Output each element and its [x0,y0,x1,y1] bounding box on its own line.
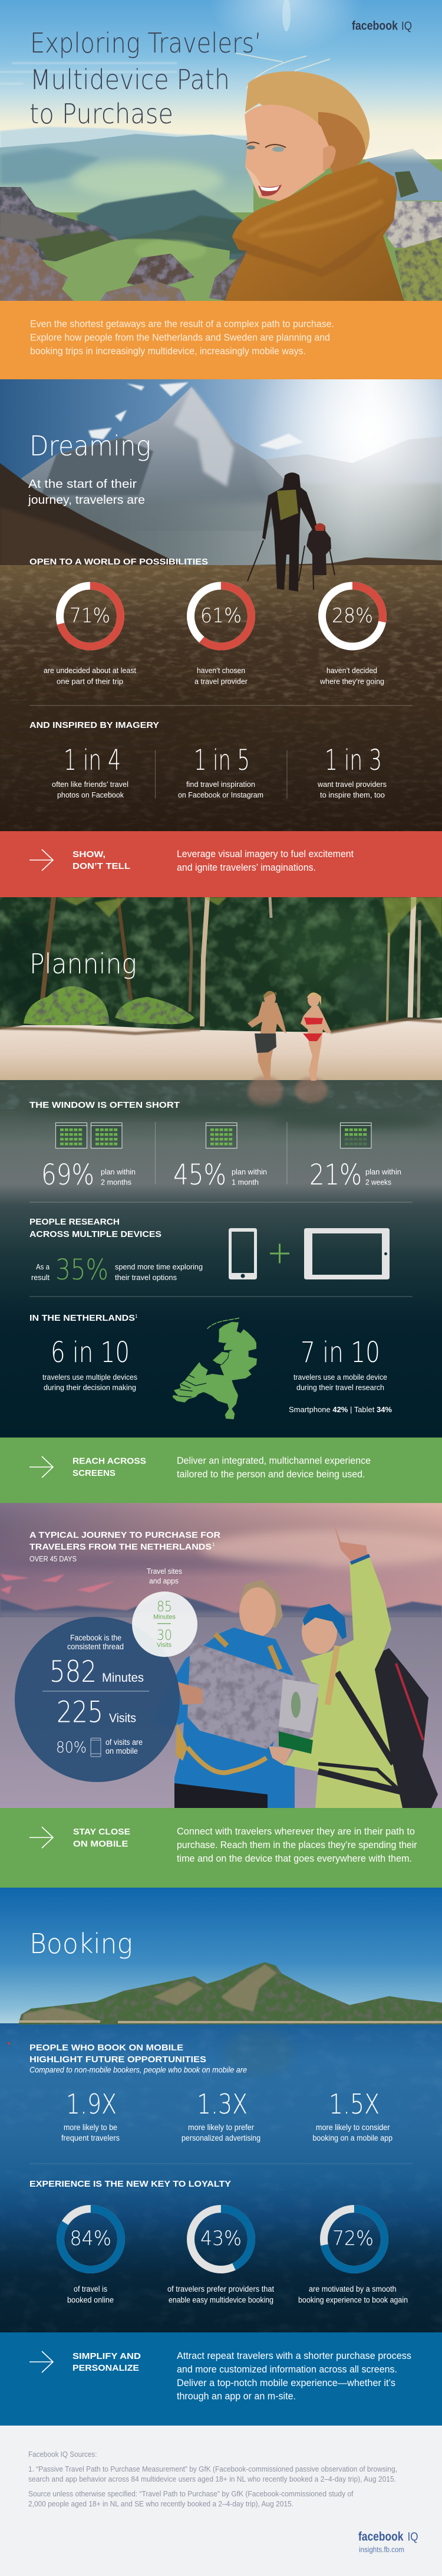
heading: typical journey: TRAVELERS FROM THE NETHERLANDS [29,1542,212,1552]
stat: 6 in 10: 6 in 10 [51,1336,130,1369]
stat: 45%: 1 month [232,1177,259,1187]
arrow [29,1827,53,1848]
stat: 1 in 5 [178,744,263,799]
stat: 1 in 4 [52,744,128,799]
heading: people research across multiple devices: PEOPLE RESEARCH [29,1218,120,1227]
stat: 1 in 3 [317,744,387,799]
callout text: Attract repeat travelers with a shorter purchase process [177,2351,411,2361]
panel: footer [28,2450,418,2554]
text block: sources: 2,000 people aged 18+ in NL and SE who recently booked a 2–4-day trip), Aug 2015. [28,2500,293,2508]
caption: 43%: enable easy multidevice booking [169,2296,273,2304]
stat: 7 in 10: Smartphone 42% | Tablet 34% [289,1405,392,1414]
stat: 1 in 3: to inspire them, too [320,790,385,799]
panel: hero [0,0,442,301]
stat: 69% [41,1159,136,1192]
caption: 84%: of travel is [74,2285,107,2293]
callout text [177,849,354,873]
donut: 71% [60,586,120,647]
stat: 21%: plan within [365,1167,401,1176]
stat: 35%: As a [36,1262,50,1271]
donut: 28%: 28% [332,604,373,628]
illustration: hiking map [177,1641,319,1766]
callout text: and more customized information across all screens. [177,2364,397,2375]
callout title: DON’T TELL [72,862,130,871]
caption: 28% [319,666,384,685]
illustration: woman with blue jacket [152,1580,295,1808]
callout title: STAY CLOSE [73,1827,130,1837]
caption: 84%: booked online [67,2296,114,2304]
stat: 1 in 4: often like friends’ travel [52,780,128,789]
icon: plus [270,1243,289,1264]
donut: 43% [191,2209,251,2270]
caption: 61% [194,666,248,685]
stat: 1.3X: more likely to prefer [188,2123,254,2132]
text block: sources: Source unless otherwise specified: “Travel Path to Purchase” by GfK (Facebook-commissioned study of [28,2490,354,2498]
stat: 35%: 35% [55,1253,108,1287]
photo: hikers below a mountain [0,309,442,831]
stat: 69%: 2 months [101,1177,131,1187]
stat: 35%: their travel options [115,1273,177,1282]
panel: typical journey [0,1503,442,1808]
logo: facebook IQ: facebook [358,2530,404,2544]
stat: 69%: plan within [101,1167,136,1176]
stat: 1.5X [312,2088,392,2142]
title: to Purchase [29,98,173,130]
stat: 6 in 10 [42,1336,137,1392]
logo: facebook IQ: IQ [408,2531,418,2544]
stat: 1 in 3: want travel providers [317,780,387,789]
logo: facebook IQ: IQ [401,20,412,33]
bubble: facebook: Facebook is the [70,1633,121,1642]
caption: 61%: haven’t chosen [197,666,245,675]
text block: intro: Explore how people from the Netherlands and Sweden are planning and [30,332,330,343]
stat: 1.5X: booking on a mobile app [312,2134,392,2142]
callout title [72,850,130,871]
callout text: tailored to the person and device being used. [177,1469,365,1479]
heading: people research across multiple devices [29,1218,161,1239]
donut: 61%: 61% [200,604,242,628]
caption: 61%: a travel provider [194,677,248,685]
bubble: facebook: on mobile [105,1747,138,1755]
heading: open to a world of possibilities: OPEN TO A WORLD OF POSSIBILITIES [29,557,208,567]
photo: mountain vista with woman [0,0,442,301]
stat: 1.9X [61,2088,120,2142]
caption: 28%: haven’t decided [326,666,377,675]
logo: facebook IQ: insights.fb.com [359,2546,404,2554]
icon: two-month calendars [55,1123,122,1148]
caption: 72%: booking experience to book again [298,2296,408,2304]
callout title: ON MOBILE [73,1839,128,1849]
illustration: woman with yellow jacket and backpack [285,1522,438,1808]
stat: 7 in 10 [289,1336,392,1414]
bubble: facebook: 225 [57,1695,103,1730]
stat: 7 in 10: during their travel research [296,1383,384,1392]
map: the netherlands [173,1318,257,1419]
bubble: travel sites and apps [132,1591,197,1657]
donut: 61% [191,586,251,647]
bubble: travel sites and apps: Minutes [153,1614,176,1621]
text block: sources [28,2450,397,2508]
heading: Planning: Planning [29,948,137,980]
bubble: travel sites and apps: 85 [157,1599,172,1615]
callout title: SHOW, [72,850,105,859]
stat: 45%: 45% [173,1159,226,1192]
heading: people who book on mobile: Compared to non-mobile bookers, people who book on mobile are [29,2065,247,2074]
heading: typical journey: A TYPICAL JOURNEY TO PURCHASE FOR [29,1530,220,1540]
callout text: through an app or an m-site. [177,2391,296,2402]
icon: phone [229,1228,257,1279]
panel: planning [0,897,442,1438]
callout text: purchase. Reach them in the places they’re spending their [177,1840,417,1850]
caption: 28%: where they’re going [319,677,384,685]
caption: 71% [44,666,136,685]
callout: stay close on mobile [0,1808,442,1888]
stat: 35%: result [31,1273,50,1282]
heading: people research across multiple devices: ACROSS MULTIPLE DEVICES [29,1230,161,1239]
stat: 1 in 5: find travel inspiration [186,780,255,789]
callout: show, don't tell [0,831,442,897]
callout title: SIMPLIFY AND [72,2351,141,2361]
stat: 1 in 3: 1 in 3 [325,744,382,777]
caption: 72% [298,2285,408,2304]
callout title: PERSONALIZE [72,2363,139,2373]
icon: tablet [304,1228,390,1279]
title [29,27,262,130]
heading: in the netherlands: IN THE NETHERLANDS [29,1314,135,1323]
callout text: Deliver an integrated, multichannel experience [177,1456,371,1466]
stat: 1.9X: 1.9X [66,2088,117,2120]
caption: 71%: are undecided about at least [44,666,136,675]
heading: typical journey: OVER 45 DAYS [29,1555,77,1563]
stat: 1.3X: personalized advertising [182,2134,260,2142]
heading: people who book on mobile: HIGHLIGHT FUTURE OPPORTUNITIES [29,2055,206,2065]
stat: 69%: 69% [41,1159,94,1192]
stat: 1 in 4: 1 in 4 [64,744,121,777]
callout text [177,2351,411,2402]
stat: 1.5X: 1.5X [329,2088,380,2120]
callout: simplify and personalize [0,2332,442,2426]
stat: 1.3X: 1.3X [197,2088,248,2120]
text block: intro [30,319,334,356]
stat: 1.5X: more likely to consider [316,2123,390,2132]
stat: 45%: plan within [232,1167,267,1176]
stat: 1.9X: more likely to be [64,2123,117,2132]
heading: in the netherlands: 1 [135,1314,138,1319]
donut: 71%: 71% [70,604,110,628]
bubble: facebook: Visits [109,1712,136,1725]
callout text: Connect with travelers wherever they are in their path to [177,1826,415,1837]
bubble: travel sites and apps: 30 [157,1627,172,1643]
heading: typical journey: 1 [212,1542,215,1547]
stat: 1 in 4: photos on Facebook [57,790,124,799]
logo: facebook IQ [358,2530,418,2554]
label: travel sites and apps [147,1567,182,1586]
bubble: travel sites and apps: Visits [157,1642,171,1649]
stat: 7 in 10: 7 in 10 [301,1336,380,1369]
callout text [177,1456,371,1479]
illustration: running couple [248,991,331,1081]
callout text [177,1826,417,1864]
stat: 45% [173,1159,267,1192]
stat: 21%: 21% [309,1159,362,1192]
photo: couple running on beach [0,897,442,1438]
subheading: journey, travelers are [28,494,145,507]
panel: intro [0,301,442,379]
text block: sources: 1. “Passive Travel Path to Purchase Measurement” by GfK (Facebook-commissioned passive observation of browsing, [28,2465,397,2473]
heading: people who book on mobile [29,2043,247,2074]
heading: Booking: Booking [29,1928,133,1960]
icon: two-week calendar [341,1123,371,1148]
illustration: hikers [248,472,335,592]
panel: booking [0,1888,442,2332]
arrow [29,849,53,871]
callout: reach across screens [0,1438,442,1503]
title: Multidevice Path [30,64,230,96]
bubble: facebook: 582 [50,1655,97,1689]
bubble: facebook: 80% [56,1739,87,1757]
callout text: Leverage visual imagery to fuel excitement [177,849,354,859]
text block: sources: Facebook IQ Sources: [28,2450,97,2459]
icon: one-month calendar [206,1123,237,1148]
panel: dreaming [0,379,442,831]
caption: 71%: one part of their trip [57,677,123,685]
callout title: SCREENS [72,1468,116,1478]
bubble: facebook: of visits are [105,1738,143,1747]
callout title: REACH ACROSS [72,1456,146,1466]
heading: experience is the new key to loyalty: EXPERIENCE IS THE NEW KEY TO LOYALTY [29,2179,231,2189]
stat: 1.9X: frequent travelers [61,2134,120,2142]
photo: two women with a map at sunset [0,1503,442,1808]
text block: intro: booking trips in increasingly multidevice, increasingly mobile ways. [30,346,306,356]
logo: facebook IQ: facebook [352,19,398,33]
stat: 1.3X [182,2088,260,2142]
label: travel sites and apps: Travel sites [147,1567,182,1576]
donut: 72%: 72% [332,2227,374,2250]
callout title [72,1456,146,1478]
stat: 35%: spend more time exploring [115,1262,203,1271]
stat: 6 in 10: during their decision making [44,1383,136,1392]
label: travel sites and apps: and apps [149,1576,179,1586]
caption: 84% [67,2285,114,2304]
heading: people who book on mobile: PEOPLE WHO BOOK ON MOBILE [29,2043,183,2053]
stat: 7 in 10: travelers use a mobile device [293,1373,387,1381]
stat: 1 in 5: 1 in 5 [194,744,250,777]
text block: sources: search and app behavior across 84 multidevice users aged 18+ in NL who recently booked a 2–4-day trip), Aug 2015. [28,2475,396,2483]
caption: 72%: are motivated by a smooth [309,2285,396,2293]
donut: 84% [60,2209,121,2270]
bubble: facebook [15,1617,180,1782]
callout text: time and on the device that goes everywhere with them. [177,1853,412,1864]
callout text: and ignite travelers’ imaginations. [177,862,316,873]
subheading: At the start of their [28,478,137,491]
stat: 35% [31,1253,203,1287]
subheading [28,478,145,507]
heading: and inspired by imagery: AND INSPIRED BY IMAGERY [29,721,159,730]
bubble: facebook: consistent thread [67,1642,124,1651]
heading: typical journey [29,1530,220,1563]
caption: 43%: of travelers prefer providers that [167,2285,274,2293]
heading: the window is often short: THE WINDOW IS OFTEN SHORT [29,1101,180,1110]
donut: 28% [322,586,383,647]
stat: 21%: 2 weeks [365,1177,391,1187]
callout text: Deliver a top-notch mobile experience—whether it’s [177,2378,395,2388]
donut: 43%: 43% [200,2227,242,2250]
donut: 84%: 84% [70,2227,111,2250]
stat: 21% [309,1159,401,1192]
caption: 43% [167,2285,274,2304]
stat: 1 in 5: on Facebook or Instagram [178,790,263,799]
photo: island and sea [0,1888,442,2332]
bubble: facebook: Minutes [102,1671,144,1685]
text block: intro: Even the shortest getaways are the result of a complex path to purchase. [30,319,334,329]
callout title [73,1827,130,1849]
donut: 72% [324,2209,384,2270]
title: Exploring Travelers’ [30,27,262,59]
callout title [72,2351,141,2373]
arrow [29,2351,53,2372]
heading: Dreaming: Dreaming [29,430,151,462]
stat: 6 in 10: travelers use multiple devices [42,1373,137,1381]
arrow [29,1456,53,1478]
